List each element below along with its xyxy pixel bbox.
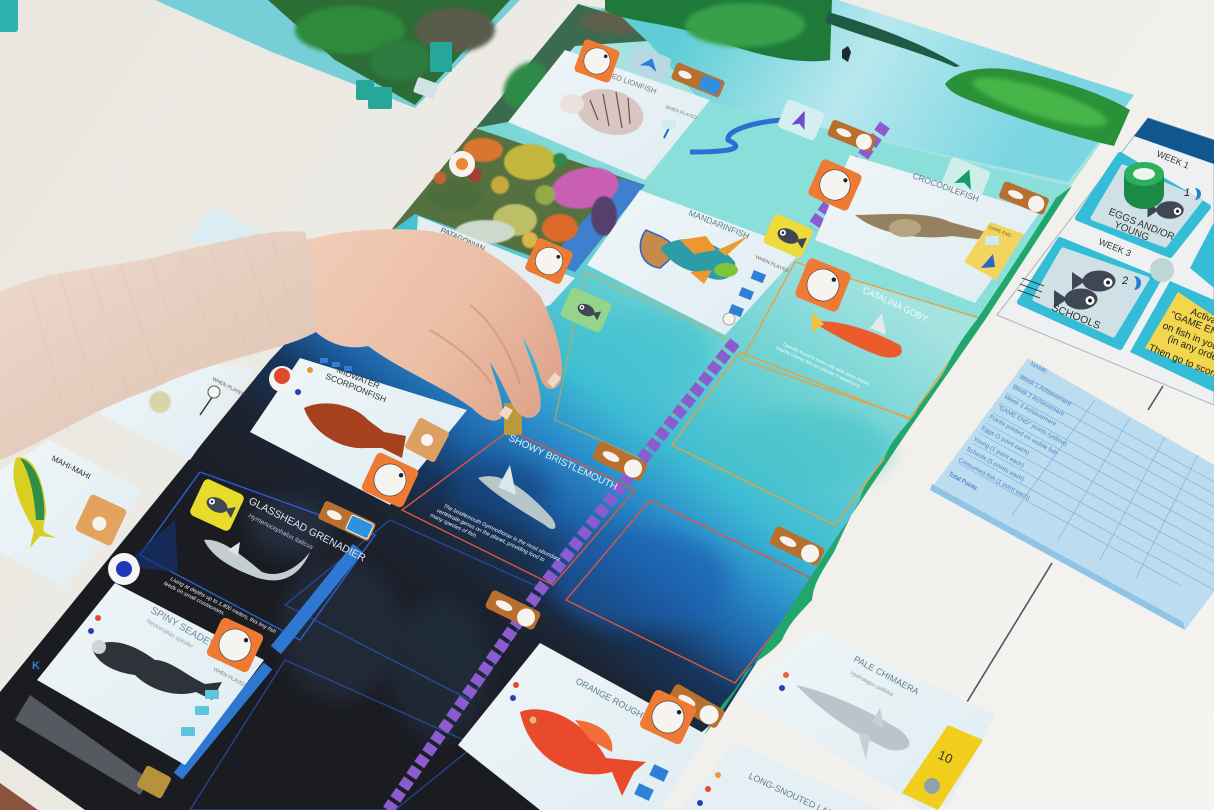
card: orange roughy bbox=[458, 643, 726, 810]
seadevil fish bbox=[92, 642, 222, 700]
white table corner, bottom left bbox=[0, 750, 85, 810]
green meeple token bbox=[1124, 162, 1164, 209]
white scorecard left: mahi-mahi bbox=[0, 440, 143, 587]
week 1: WEEK 1 bbox=[1155, 149, 1191, 171]
card: crocodilefish: GAME END bbox=[988, 224, 1013, 238]
if activated tag bbox=[74, 493, 128, 547]
card: glasshead grenadier printed: GLASSHEAD GRENADIER bbox=[247, 495, 368, 565]
card: glasshead grenadier printed: Living at depths up to 1,400 meters, this tiny fish bbox=[169, 576, 277, 635]
green fish tile bbox=[559, 286, 613, 334]
table seams bbox=[967, 386, 1163, 702]
score pad bbox=[930, 358, 1214, 630]
printed cell: shiny bristlemouth: SHOWY BRISTLEMOUTH bbox=[507, 433, 619, 493]
grenadier fish bbox=[204, 540, 310, 580]
right island bbox=[945, 68, 1130, 146]
card: lionfish bbox=[508, 38, 725, 180]
score pad: Consumed fish (1 point each) bbox=[957, 457, 1031, 502]
card: spiny seadevil: SPINY SEADEVIL bbox=[148, 605, 225, 656]
arm in knit sleeve bbox=[0, 231, 317, 460]
card: patagonian (under hand): PATAGONIAN bbox=[439, 226, 486, 253]
card: pale chimaera: Hydrolagus pallidus bbox=[849, 670, 894, 698]
player aid: weeks panel: 2 bbox=[1121, 275, 1128, 287]
egg tags on the board bbox=[484, 119, 1050, 631]
score pad: Week 1 Achievement bbox=[1018, 374, 1072, 408]
side lines bbox=[1018, 278, 1044, 298]
mottled dark rock texture bbox=[250, 310, 890, 740]
grey slot and gold marker: K bbox=[32, 660, 40, 672]
score pad: Total Points bbox=[947, 471, 978, 492]
score pad: Week 2 Achievement bbox=[1011, 384, 1065, 418]
goby fish bbox=[812, 321, 902, 358]
card: mandarinfish: MANDARINFISH bbox=[687, 208, 751, 241]
top lagoon scene bbox=[604, 0, 1134, 182]
card: pale chimaera: PALE CHIMAERA bbox=[852, 654, 921, 697]
sun token bbox=[449, 151, 475, 177]
scorpionfish drawing bbox=[304, 403, 406, 458]
blue eggs tag bbox=[317, 500, 377, 542]
purple meander stripe bbox=[388, 125, 885, 810]
top blue tag bbox=[671, 62, 725, 98]
flipper tile blue bbox=[628, 45, 672, 83]
hand bbox=[306, 229, 562, 421]
printed cell: shiny bristlemouth: many species of fish. bbox=[429, 513, 478, 540]
score pad: Schools (5 points each) bbox=[965, 446, 1025, 483]
gold marker near hand bbox=[504, 403, 522, 435]
corner token bbox=[0, 0, 18, 32]
score pad: "GAME END" points (yellow) bbox=[996, 404, 1068, 448]
white scorecard left: mahi-mahi: MAHI-MAHI bbox=[50, 454, 92, 481]
printed cell: catalina goby: brightly colored fish are popular in aquariums. bbox=[775, 345, 862, 389]
green scalloped edge bbox=[702, 186, 1072, 738]
score pad: NAME: bbox=[1029, 361, 1050, 376]
printed cell: catalina goby: Typically found in areas with wide steep slopes, bbox=[782, 341, 871, 387]
card: pale chimaera bbox=[737, 627, 995, 810]
blue token stack bbox=[320, 358, 352, 371]
player aid: weeks panel: 1 bbox=[1184, 187, 1190, 199]
grey slot and gold marker bbox=[15, 660, 172, 799]
player aid: weeks panel: SCHOOLS bbox=[1050, 302, 1102, 332]
printed cell: shiny bristlemouth: The bristlemouth Gymnothorax is the most abundant bbox=[442, 503, 561, 563]
card: long-snouted lancetfish bbox=[680, 742, 882, 810]
card: spiny seadevil: WHEN PLAYED bbox=[212, 666, 247, 689]
player aid: weeks panel: EGGS AND/OR bbox=[1107, 207, 1176, 243]
yellow game end bbox=[902, 725, 983, 810]
roughy fish bbox=[520, 709, 646, 796]
card: mandarinfish: WHEN PLAYED bbox=[754, 254, 790, 275]
score pad: Points printed on visible fish bbox=[988, 414, 1059, 457]
mandarin fish bbox=[640, 230, 674, 268]
card: midwater scorpionfish bbox=[250, 358, 467, 509]
white card behind sleeve: WHEN PLAYED bbox=[211, 376, 246, 398]
bristlemouth fish bbox=[478, 476, 555, 529]
card: lionfish: WHEN PLAYED bbox=[665, 104, 698, 120]
week 2 partial tile bbox=[1190, 222, 1214, 288]
card: spiny seadevil: Neoceratias spinifer bbox=[145, 619, 195, 651]
card: spiny seadevil bbox=[37, 583, 265, 765]
yellow game end bbox=[964, 222, 1024, 280]
blue side stripes bbox=[178, 548, 358, 776]
flipper tile green bbox=[941, 156, 991, 200]
card: glasshead grenadier printed: feeds on small crustaceans. bbox=[162, 581, 226, 617]
card: crocodilefish bbox=[807, 155, 1040, 303]
card: pale chimaera: 10 bbox=[936, 747, 955, 767]
player aid: weeks panel bbox=[997, 118, 1214, 405]
lionfish drawing bbox=[571, 82, 649, 142]
board fragment: top-left island bbox=[155, 0, 520, 109]
card: glasshead grenadier printed: Hymenocephalus italicus bbox=[247, 513, 315, 552]
top-left mangrove roots strip bbox=[390, 4, 690, 232]
blue wave icon bbox=[690, 120, 782, 152]
printed cell: catalina goby bbox=[775, 257, 929, 392]
upper reef band bbox=[652, 100, 1070, 320]
final week yellow box bbox=[1130, 281, 1214, 392]
score pad: Young (1 point each) bbox=[972, 436, 1025, 469]
crocodile fish bbox=[855, 214, 986, 240]
score pad: Eggs (1 point each) bbox=[980, 425, 1030, 457]
card: crocodilefish: CROCODILEFISH bbox=[911, 170, 980, 204]
week 3: WEEK 3 bbox=[1097, 237, 1133, 259]
printed cell: shiny bristlemouth: vertebrate genus on the planet, providing food to bbox=[436, 508, 545, 563]
card: glasshead grenadier printed bbox=[108, 478, 377, 641]
card: midwater scorpionfish: MIDWATER bbox=[335, 365, 381, 391]
yellow fish tile bbox=[762, 213, 814, 259]
card: orange roughy: ORANGE ROUGHY bbox=[574, 676, 650, 723]
blue ring token bbox=[108, 553, 140, 585]
printed cell: catalina goby: CATALINA GOBY bbox=[861, 285, 929, 324]
chimaera fish bbox=[796, 685, 909, 750]
player aid: weeks panel: YOUNG bbox=[1112, 220, 1151, 244]
card: lionfish: RED LIONFISH bbox=[605, 69, 658, 96]
grid lines of board cells bbox=[140, 262, 980, 810]
yellow fish tile bbox=[189, 478, 245, 532]
teal game pieces bbox=[356, 42, 452, 109]
card: midwater scorpionfish: SCORPIONFISH bbox=[324, 371, 388, 404]
white card behind sleeve bbox=[95, 208, 262, 460]
score pad: Week 3 Achievement bbox=[1003, 394, 1057, 428]
sun/red markers bbox=[269, 366, 295, 392]
flipper tile purple bbox=[777, 99, 825, 141]
printed cell: shiny bristlemouth bbox=[429, 433, 619, 576]
coral reef panel bbox=[390, 128, 645, 272]
mahi fish bbox=[13, 457, 56, 548]
card: patagonian (under hand) bbox=[412, 216, 575, 345]
card: mandarinfish bbox=[587, 190, 803, 335]
if activated tag bbox=[404, 417, 450, 463]
